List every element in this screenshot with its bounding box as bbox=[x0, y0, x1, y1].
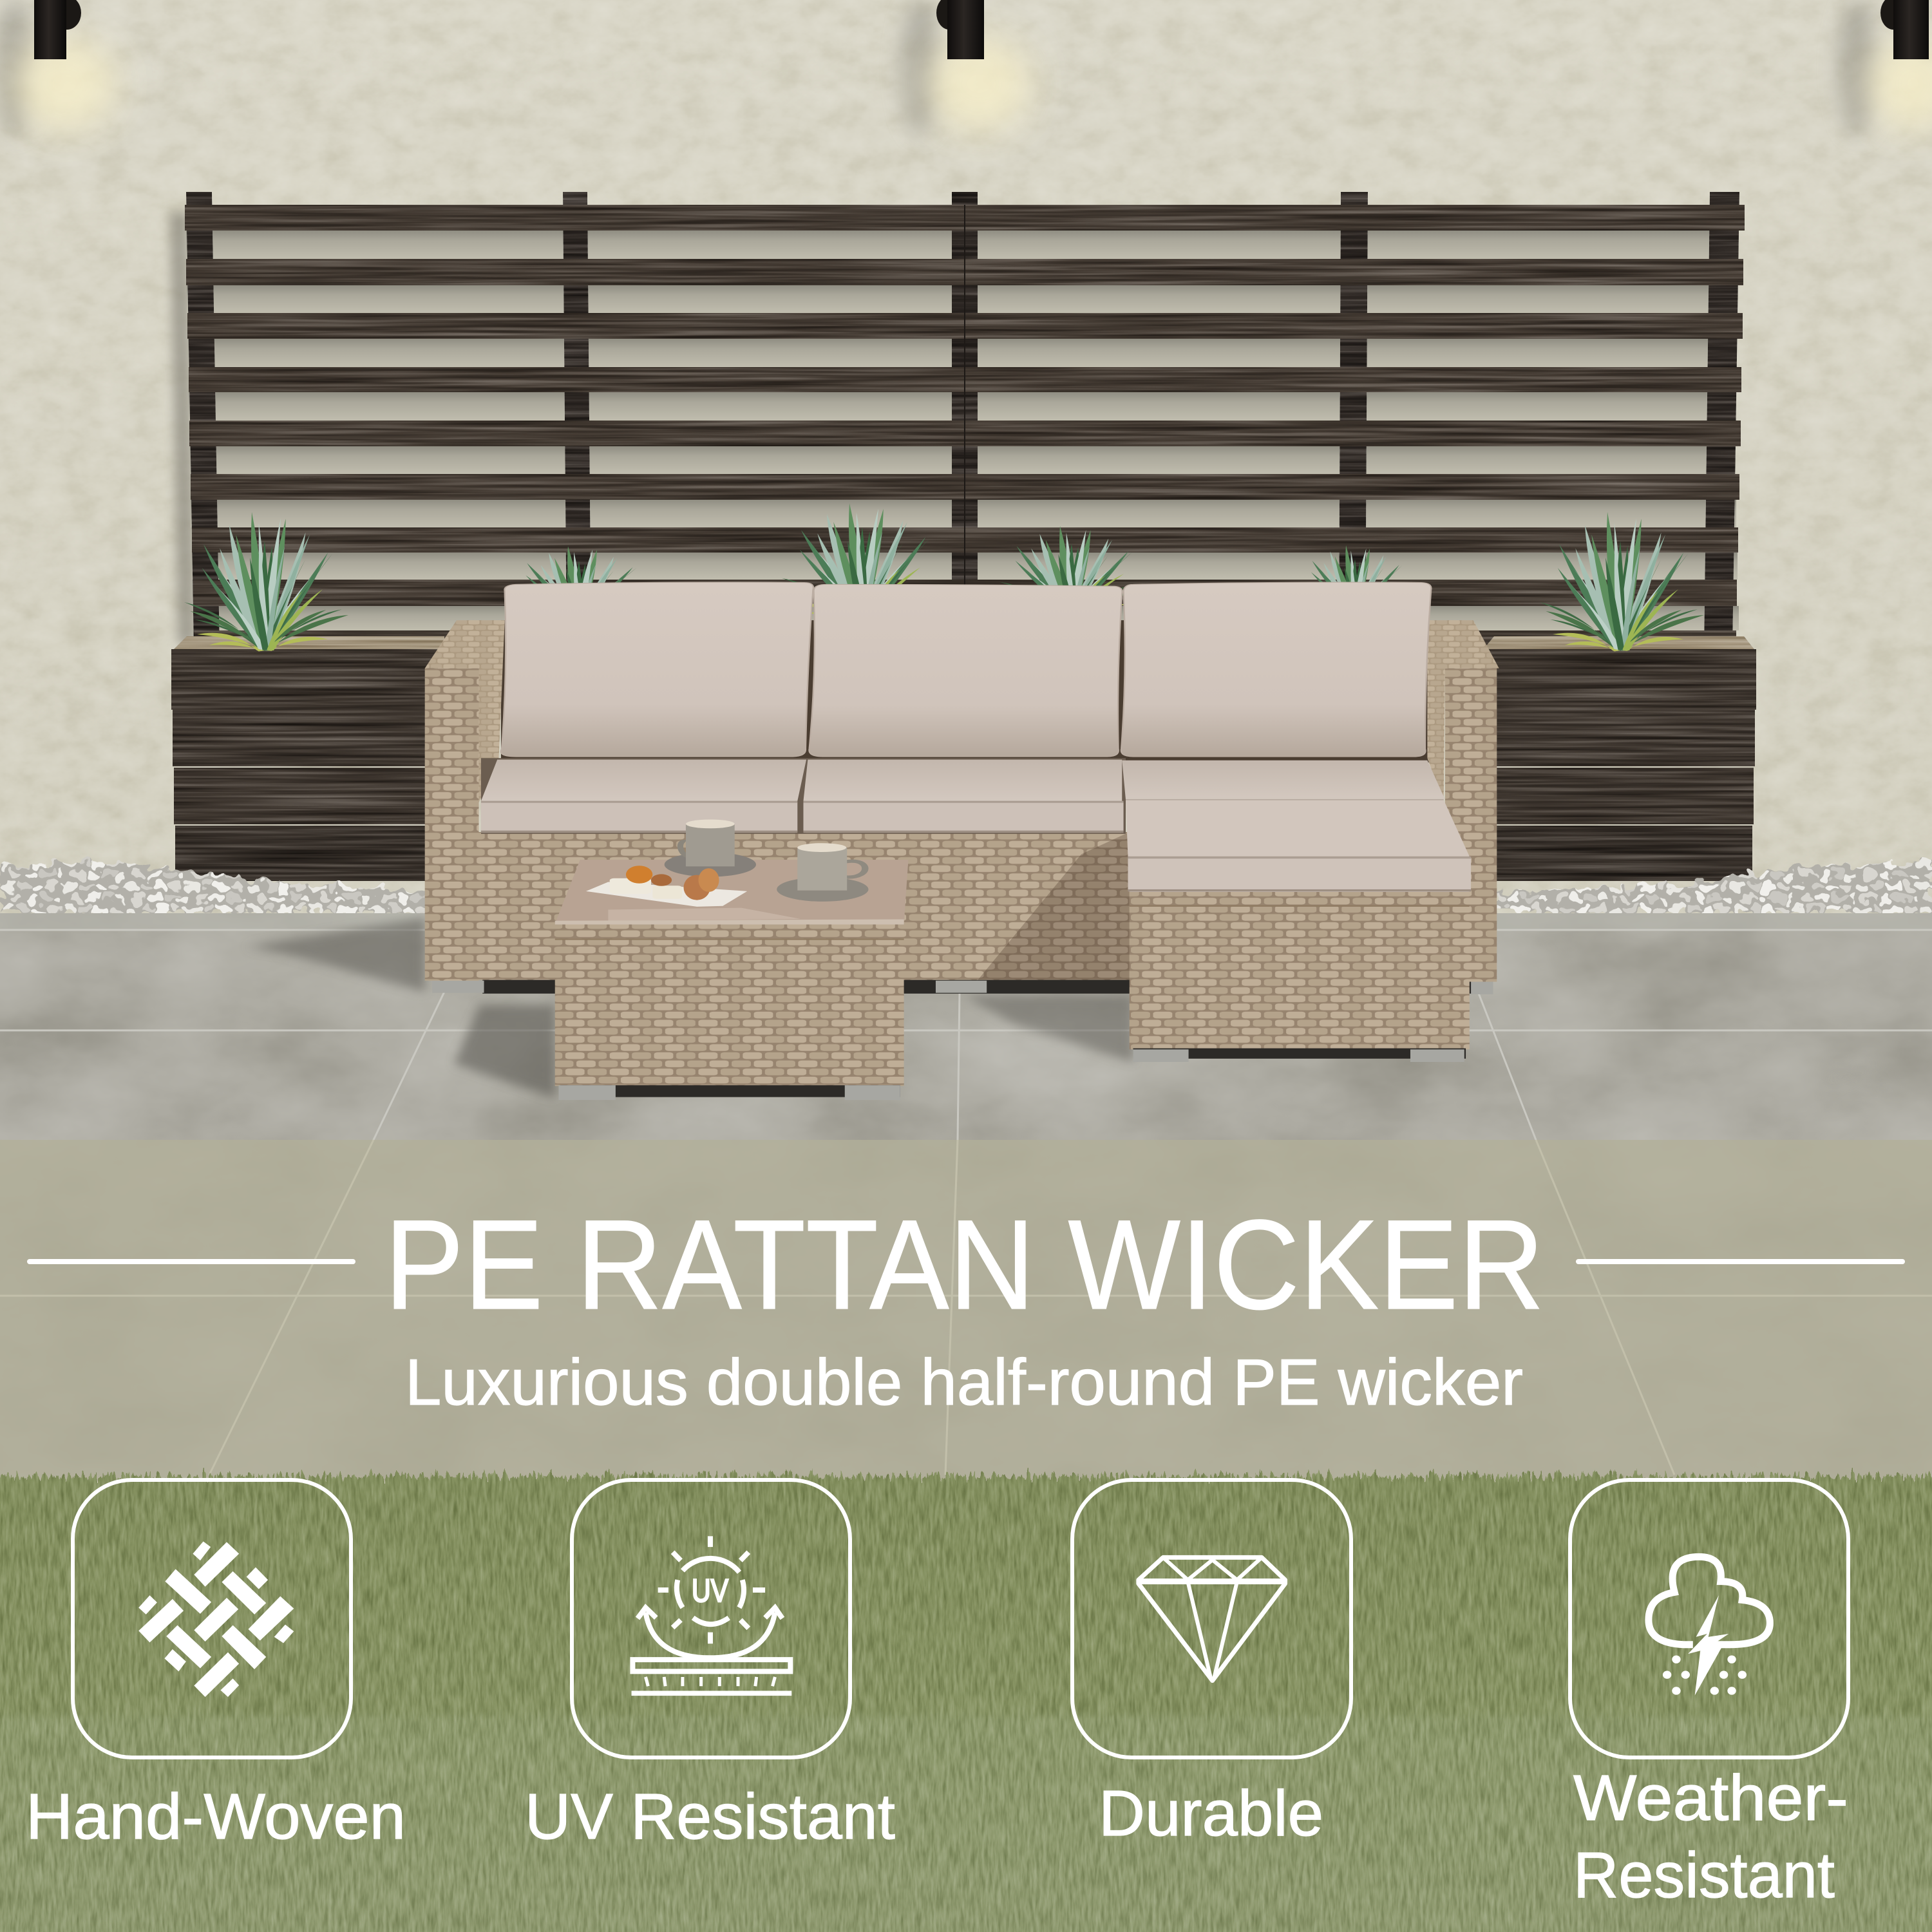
left arm bbox=[425, 620, 505, 981]
feature: UV resistant bbox=[525, 1480, 895, 1853]
planter: left bbox=[171, 636, 444, 881]
label: UV Resistant bbox=[525, 1781, 895, 1853]
stone paved floor bbox=[0, 913, 1932, 1480]
plants bbox=[182, 504, 1704, 661]
card outline bbox=[73, 1480, 351, 1757]
rule: right of title bbox=[1576, 1259, 1905, 1264]
icon: diamond bbox=[1139, 1557, 1285, 1681]
planter: right bbox=[1481, 636, 1756, 881]
feature: weather-resistant bbox=[1570, 1480, 1848, 1911]
sofa base wicker bbox=[479, 832, 1470, 980]
wall lamp: left bbox=[0, 0, 116, 135]
seat cushion: left bbox=[481, 759, 806, 833]
wooden slat fence bbox=[170, 192, 1745, 654]
feature: durable bbox=[1072, 1480, 1351, 1850]
seat cushion: right bbox=[1122, 761, 1445, 799]
sofa backing bbox=[501, 620, 1429, 762]
title: PE RATTAN WICKER bbox=[384, 1193, 1544, 1336]
icon: UV sun bbox=[632, 1536, 791, 1696]
subtitle: Luxurious double half-round PE wicker bbox=[405, 1347, 1523, 1419]
sofa base shade bbox=[978, 832, 1130, 980]
coffee cup: front bbox=[777, 843, 868, 902]
label: Durable bbox=[1099, 1777, 1323, 1850]
seat cushion: centre bbox=[803, 759, 1124, 833]
wall background bbox=[0, 0, 1932, 921]
right arm bbox=[1427, 620, 1499, 981]
coffee table bbox=[555, 860, 908, 1100]
translucent heading band bbox=[0, 1140, 1932, 1481]
outdoor sofa set bbox=[425, 582, 1499, 1100]
label: Hand-Woven bbox=[26, 1781, 406, 1853]
sofa legs bbox=[432, 981, 1493, 994]
back cushion: right bbox=[1121, 582, 1431, 757]
floor shadows bbox=[245, 918, 1133, 1098]
icon: storm cloud bbox=[1649, 1557, 1770, 1696]
label line 1: Weather- bbox=[1573, 1762, 1848, 1834]
feature: hand-woven bbox=[26, 1480, 406, 1853]
back cushion: centre bbox=[809, 584, 1122, 757]
paving joints seen through band bbox=[0, 1140, 1932, 1475]
card outline bbox=[1072, 1480, 1351, 1757]
seat cushion gap bbox=[481, 758, 1126, 834]
white gravel: right bbox=[1494, 862, 1932, 913]
sofa under shadow bbox=[482, 978, 1473, 994]
white gravel: left bbox=[0, 862, 431, 913]
icon: UV sun: UV bbox=[692, 1573, 729, 1609]
label line 2: Resistant bbox=[1573, 1839, 1835, 1911]
back cushion: left bbox=[501, 582, 813, 757]
wall lamp: centre bbox=[902, 0, 1030, 135]
plate of snacks bbox=[586, 866, 747, 907]
wall lamp: right bbox=[1839, 0, 1932, 135]
icon: woven pattern bbox=[138, 1541, 294, 1697]
coffee cup: back bbox=[665, 819, 756, 876]
card outline bbox=[572, 1480, 850, 1757]
rule: left of title bbox=[27, 1259, 355, 1264]
ottoman bbox=[1126, 799, 1471, 1062]
card outline bbox=[1570, 1480, 1848, 1757]
grass band bbox=[0, 1476, 1932, 1932]
